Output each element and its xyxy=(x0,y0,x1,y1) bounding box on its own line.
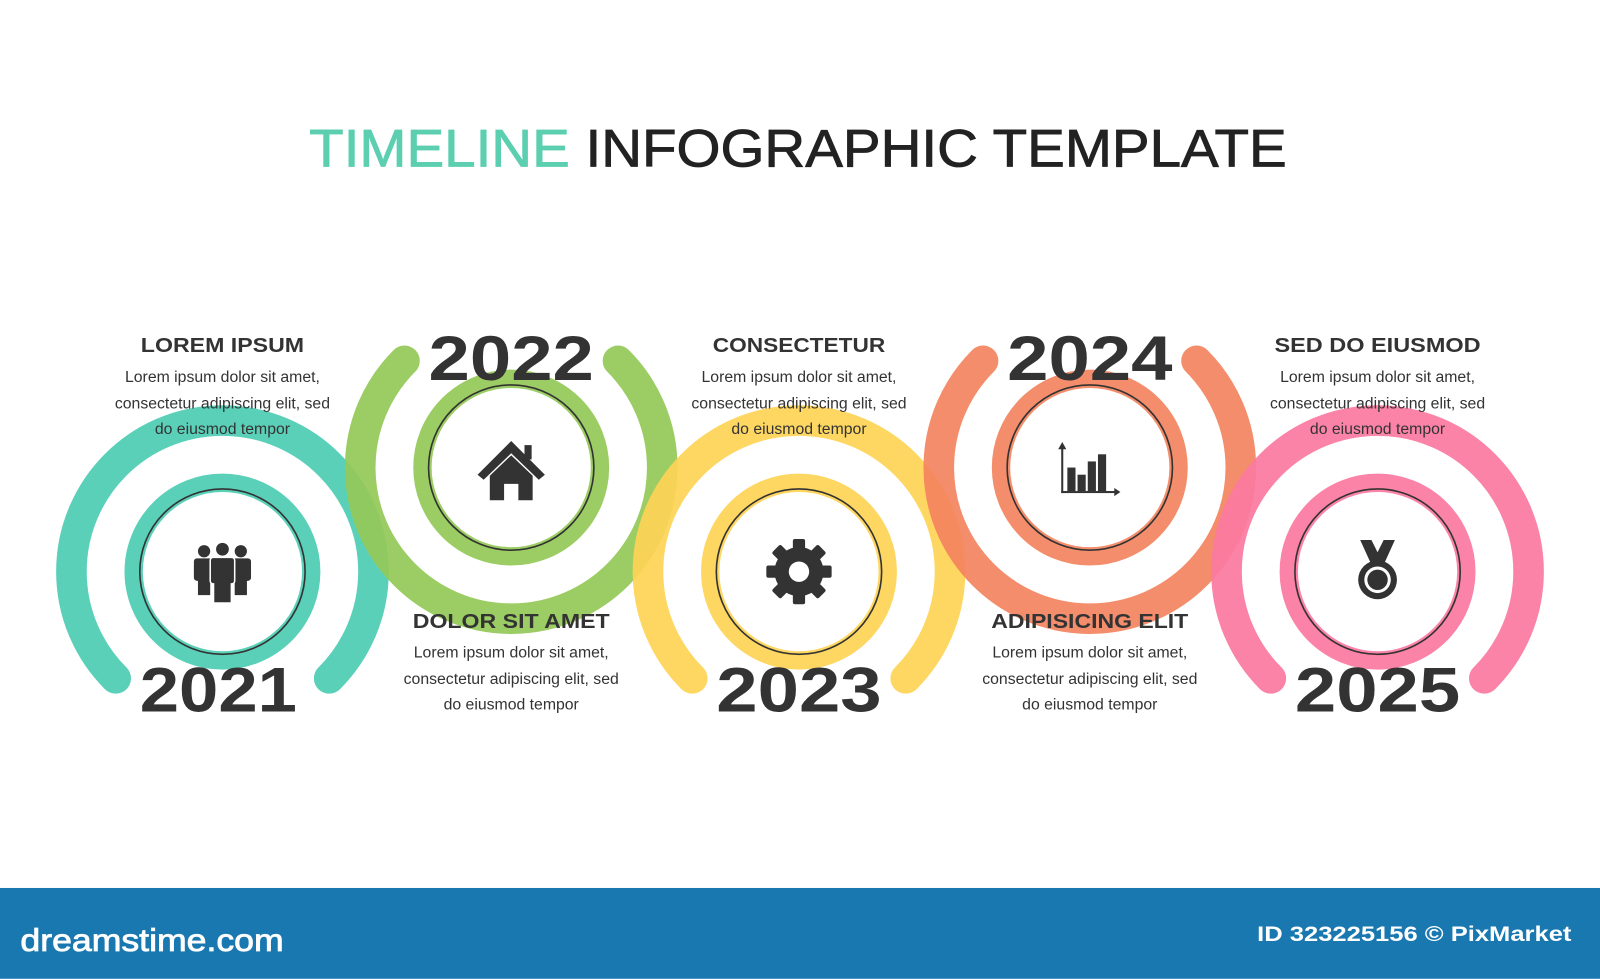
text block: dolor sit amet: consectetur adipiscing elit, sed xyxy=(404,671,619,688)
text block: adipisicing elit xyxy=(982,611,1197,713)
text block: adipisicing elit: ADIPISICING ELIT xyxy=(991,611,1189,633)
years: 2024 xyxy=(1007,324,1172,394)
timeline circles xyxy=(71,361,1529,678)
icon: bar chart xyxy=(1058,442,1120,496)
icon: house xyxy=(478,441,545,500)
text block: dolor sit amet: DOLOR SIT AMET xyxy=(413,611,610,633)
footer bar xyxy=(0,888,1600,979)
text block: sed do eiusmod xyxy=(1270,335,1485,438)
text block: sed do eiusmod: Lorem ipsum dolor sit amet, xyxy=(1280,369,1475,386)
years xyxy=(140,324,1460,725)
text block: dolor sit amet: do eiusmod tempor xyxy=(444,696,579,713)
footer bar: ID 323225156 © PixMarket xyxy=(1257,922,1571,946)
text block: adipisicing elit: Lorem ipsum dolor sit amet, xyxy=(992,644,1187,661)
text block: lorem ipsum: Lorem ipsum dolor sit amet, xyxy=(125,369,320,386)
text block: consectetur: do eiusmod tempor xyxy=(731,421,867,438)
circle 2021 xyxy=(71,421,373,678)
text block: consectetur: consectetur adipiscing elit, sed xyxy=(691,395,907,412)
years: 2023 xyxy=(716,655,882,725)
circle 2024 xyxy=(939,361,1241,619)
text block: sed do eiusmod: consectetur adipiscing elit, sed xyxy=(1270,395,1485,412)
text block: lorem ipsum: consectetur adipiscing elit, sed xyxy=(115,395,330,412)
circle 2025 xyxy=(1227,421,1529,678)
text block: lorem ipsum: LOREM IPSUM xyxy=(141,335,304,357)
icon: people xyxy=(194,542,251,602)
text block: lorem ipsum xyxy=(115,335,330,438)
years: 2022 xyxy=(429,324,594,394)
text block: consectetur: CONSECTETUR xyxy=(713,335,886,357)
icon: medal xyxy=(1358,540,1397,599)
text block: consectetur: Lorem ipsum dolor sit amet, xyxy=(702,369,896,386)
text block: sed do eiusmod: SED DO EIUSMOD xyxy=(1274,335,1481,357)
years: 2021 xyxy=(140,655,297,725)
text block: consectetur xyxy=(691,335,907,438)
footer bar: dreamstime.com xyxy=(20,922,284,958)
title: TIMELINE INFOGRAPHIC TEMPLATE xyxy=(309,120,1287,179)
text block: sed do eiusmod: do eiusmod tempor xyxy=(1310,421,1445,438)
text block: lorem ipsum: do eiusmod tempor xyxy=(155,421,290,438)
text block: dolor sit amet: Lorem ipsum dolor sit amet, xyxy=(414,644,609,661)
circle 2022 xyxy=(360,361,662,619)
text block: adipisicing elit: consectetur adipiscing elit, sed xyxy=(982,671,1197,688)
circle 2023 xyxy=(648,421,950,678)
icon: gear xyxy=(766,539,832,604)
text block: adipisicing elit: do eiusmod tempor xyxy=(1022,696,1157,713)
text block: dolor sit amet xyxy=(404,611,619,713)
years: 2025 xyxy=(1295,655,1460,725)
